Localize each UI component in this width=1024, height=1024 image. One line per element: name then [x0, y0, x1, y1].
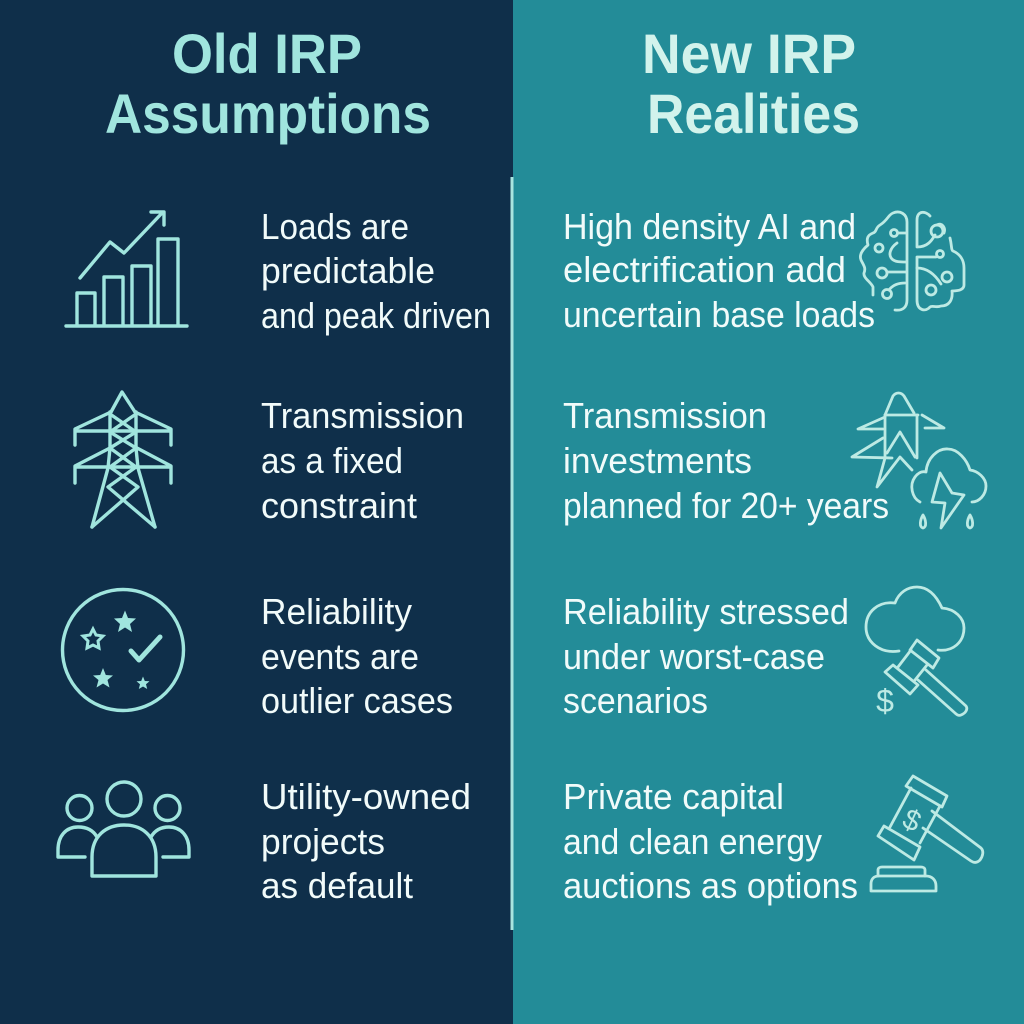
text: utility-owned projects as default: [261, 776, 471, 906]
icon: circle with stars and check: [62, 590, 184, 710]
text: transmission investments planned: planned for 20+ years: [563, 485, 889, 526]
text: loads are predictable: and peak driven: [261, 295, 491, 336]
heading: Old IRP Assumptions: Assumptions: [105, 82, 431, 145]
icon: transmission tower: [75, 392, 171, 527]
icon: cloud, gavel and dollar: $: [876, 683, 894, 719]
text: reliability events are outlier cases: events are: [261, 636, 419, 677]
text: loads are predictable: [261, 206, 491, 336]
panel: new IRP realities: [513, 0, 1024, 1024]
icon: auction gavel with dollar: $: [898, 803, 926, 839]
text: utility-owned projects as default: as default: [261, 865, 413, 906]
text: transmission investments planned: investments: [563, 440, 752, 481]
text: reliability events are outlier cases: [261, 591, 453, 721]
text: transmission as a fixed constraint: constraint: [261, 485, 417, 526]
text: reliability stressed under worst-case scenarios: scenarios: [563, 680, 708, 721]
text: loads are predictable: predictable: [261, 250, 435, 291]
text: transmission as a fixed constraint: [261, 395, 464, 526]
text: private capital and clean energy auctions: and clean energy: [563, 821, 822, 862]
text: private capital and clean energy auctions: Private capital: [563, 776, 784, 817]
text: reliability events are outlier cases: outlier cases: [261, 680, 453, 721]
icon: AI brain circuit: [860, 212, 964, 310]
text: transmission investments planned: Transmission: [563, 395, 767, 436]
icon: cloud, gavel and dollar: [866, 587, 967, 719]
icon: auction gavel with dollar: [871, 776, 983, 891]
text: high density AI and electrification: [563, 206, 875, 335]
heading: New IRP Realities: Realities: [647, 82, 860, 145]
text: reliability events are outlier cases: Reliability: [261, 591, 412, 632]
text: high density AI and electrification: uncertain base loads: [563, 294, 875, 335]
text: transmission as a fixed constraint: Transmission: [261, 395, 464, 436]
text: private capital and clean energy auctions: auctions as options: [563, 865, 858, 906]
text: private capital and clean energy auctions: [563, 776, 858, 906]
icon: three people: [58, 782, 189, 876]
heading: New IRP Realities: New IRP: [642, 22, 856, 85]
icon: tower and storm cloud: [852, 393, 986, 528]
heading: Old IRP Assumptions: Old IRP: [172, 22, 362, 85]
text: high density AI and electrification: electrification add: [563, 249, 846, 290]
heading: Old IRP Assumptions: [105, 22, 431, 145]
text: transmission investments planned: [563, 395, 889, 526]
text: loads are predictable: Loads are: [261, 206, 409, 247]
text: reliability stressed under worst-case scenarios: [563, 591, 849, 721]
text: utility-owned projects as default: projects: [261, 821, 385, 862]
text: reliability stressed under worst-case scenarios: under worst-case: [563, 636, 825, 677]
text: reliability stressed under worst-case scenarios: Reliability stressed: [563, 591, 849, 632]
text: high density AI and electrification: High density AI and: [563, 206, 856, 247]
text: transmission as a fixed constraint: as a fixed: [261, 440, 403, 481]
heading: New IRP Realities: [642, 22, 860, 145]
panel: old IRP assumptions: [0, 0, 513, 1024]
text: utility-owned projects as default: Utility-owned: [261, 776, 471, 817]
icon: bar chart with rising arrow: [66, 212, 187, 326]
